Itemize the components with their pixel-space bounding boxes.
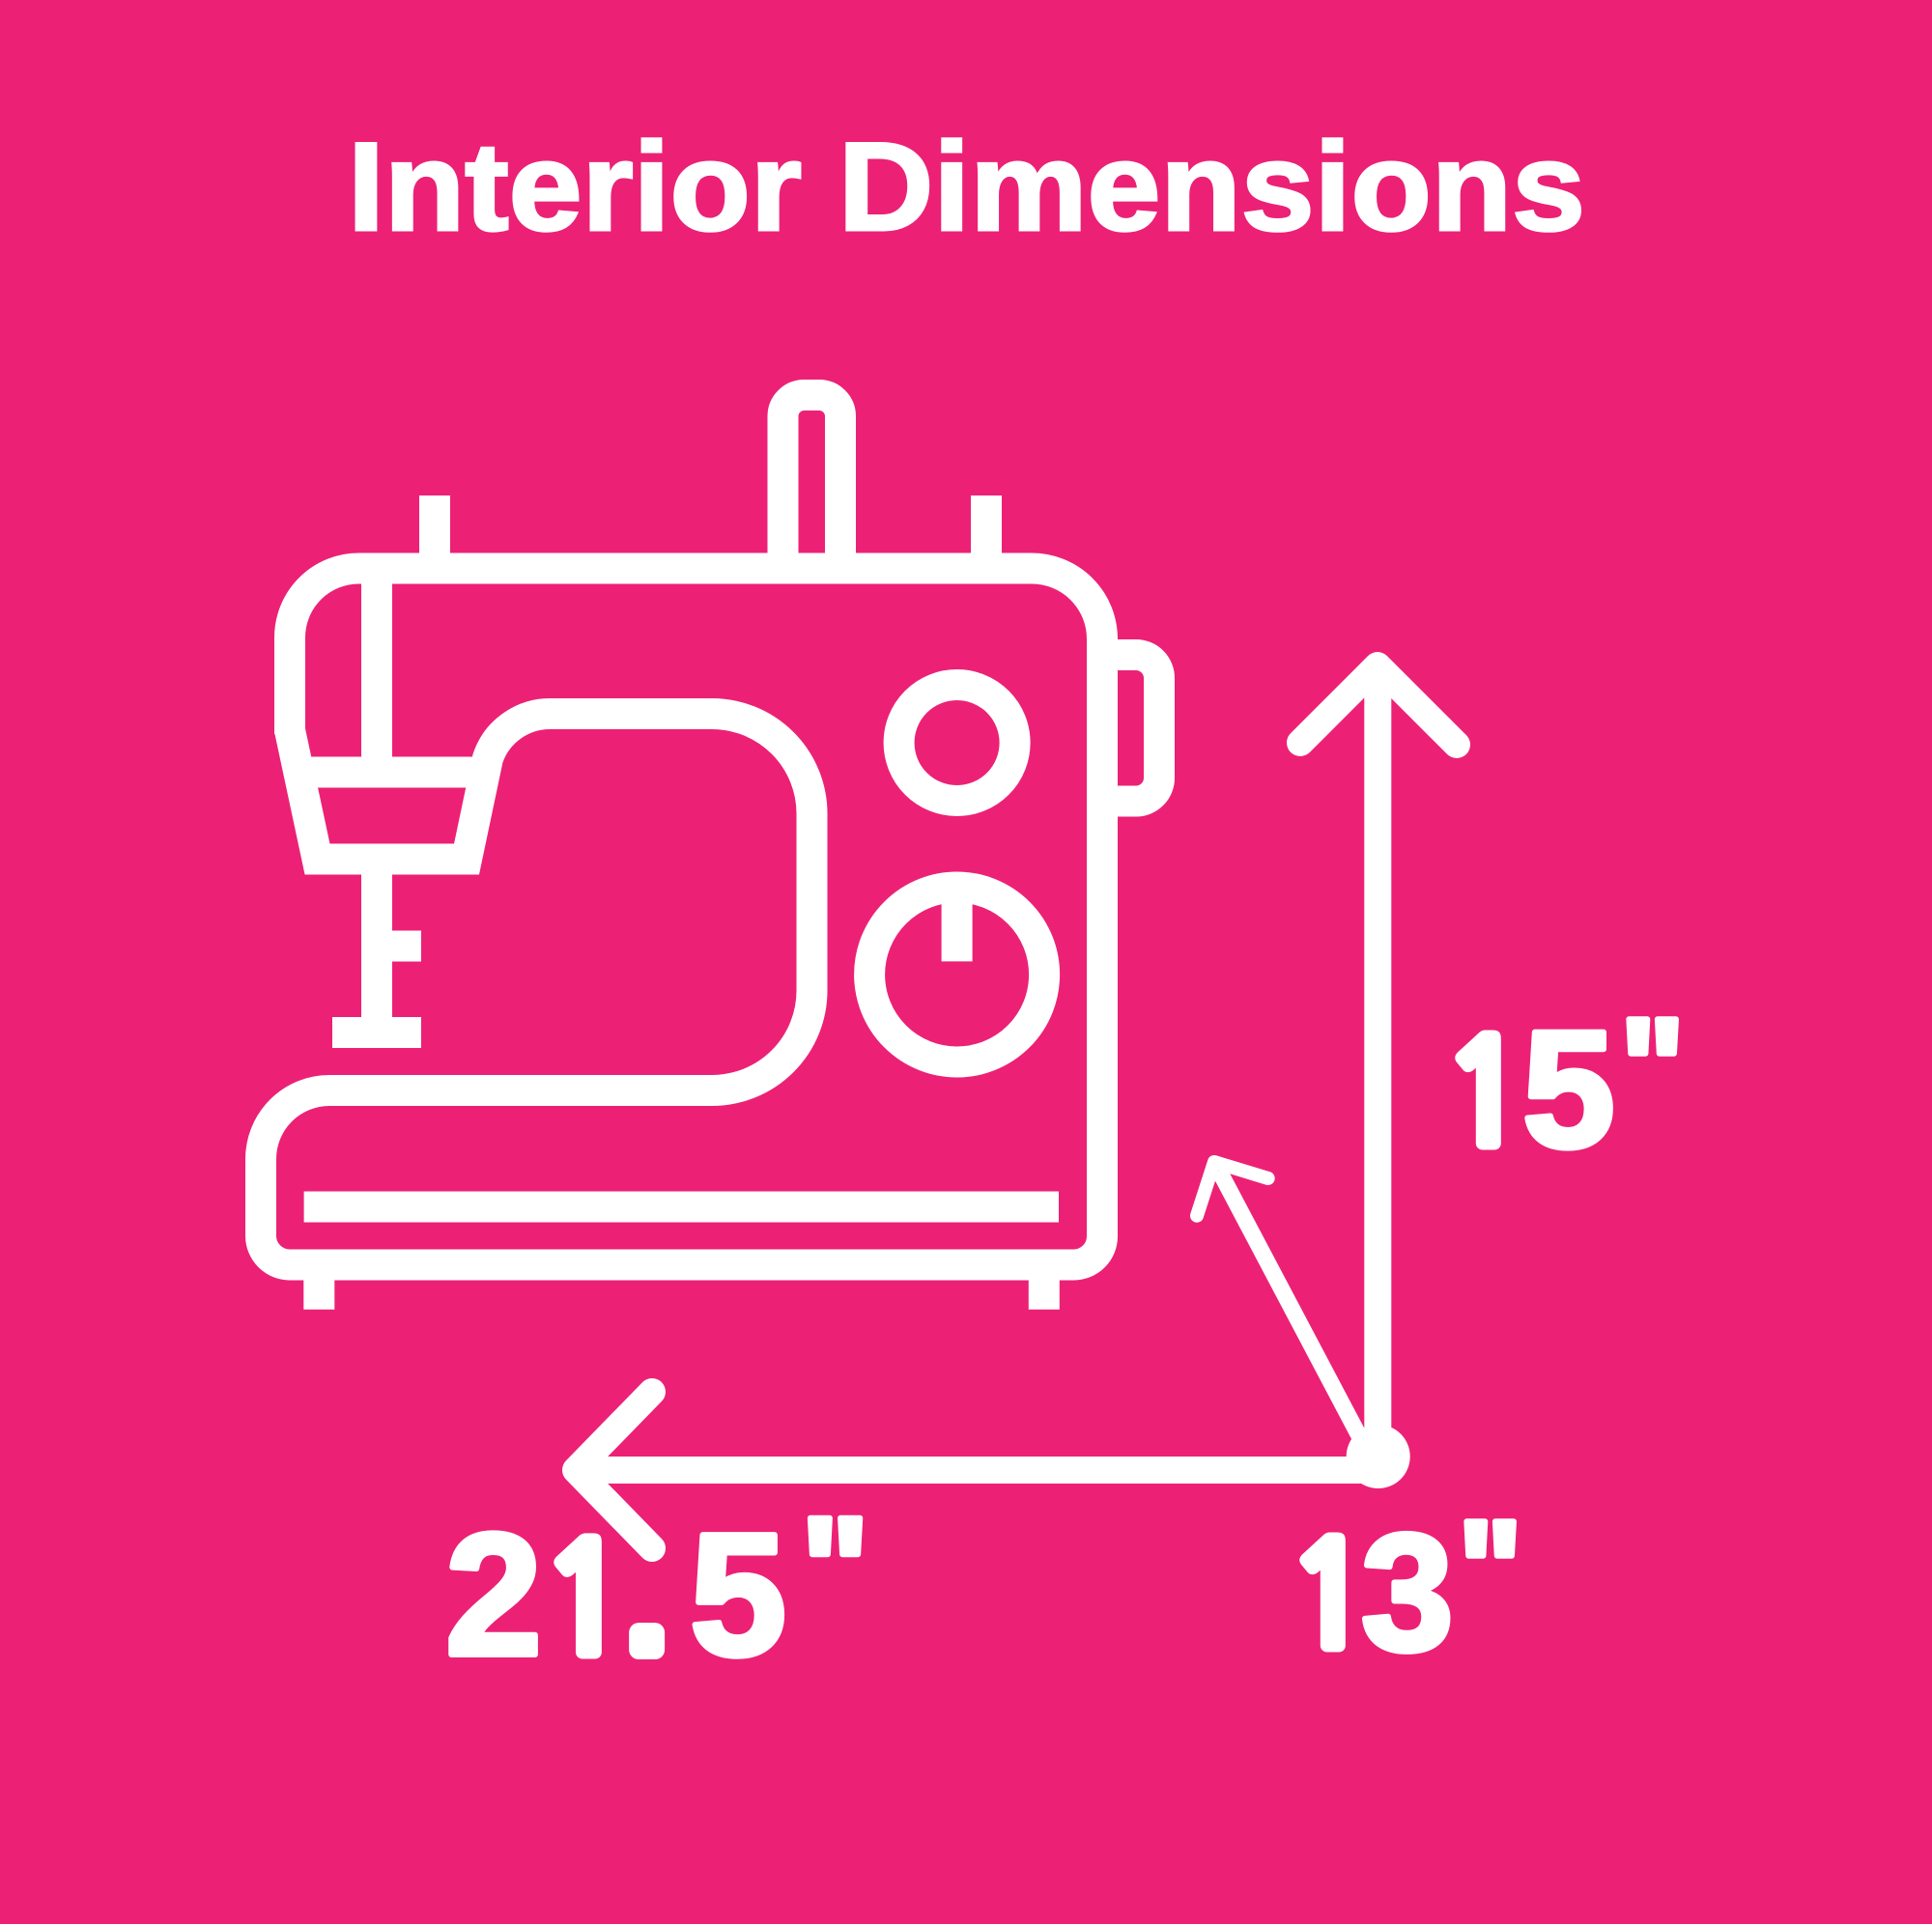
top pegs: [435, 495, 986, 568]
label: 13 inches: 3: [1361, 1500, 1454, 1685]
label: 13 inches: ": [1458, 1492, 1522, 1646]
label: 21.5 inches: ": [801, 1486, 869, 1649]
large dial: [869, 887, 1044, 1062]
thread spool holder: [782, 395, 840, 568]
base slot: [304, 1192, 1059, 1223]
small dial: [899, 685, 1015, 801]
label: 15 inches: 1: [1441, 1024, 1529, 1167]
arrow: height: [1300, 665, 1457, 1458]
needle head top band: [299, 757, 486, 788]
label: 21.5 inches: 1: [539, 1525, 632, 1677]
arrow origin dot: [1347, 1425, 1410, 1488]
arrow: depth: [1197, 1162, 1366, 1449]
hand wheel: [1102, 655, 1159, 802]
dial pointer: [942, 893, 973, 961]
icon: sewing machine: [261, 395, 1159, 1310]
feet: [319, 1265, 1044, 1310]
machine body outline and needle head: [261, 568, 1102, 1265]
label: 15 inches: 5: [1522, 997, 1615, 1182]
arrow: width: [576, 1392, 1378, 1548]
title: Interior Dimensions: [348, 116, 1585, 257]
label: 15 inches: ": [1620, 990, 1685, 1144]
label: 21.5 inches: .: [631, 1545, 663, 1675]
label: 13 inches: 1: [1286, 1526, 1374, 1669]
label: 21.5 inches: 5: [690, 1498, 786, 1692]
needle bar and presser foot: [332, 568, 421, 1033]
label: 21.5 inches: 2: [445, 1498, 542, 1692]
